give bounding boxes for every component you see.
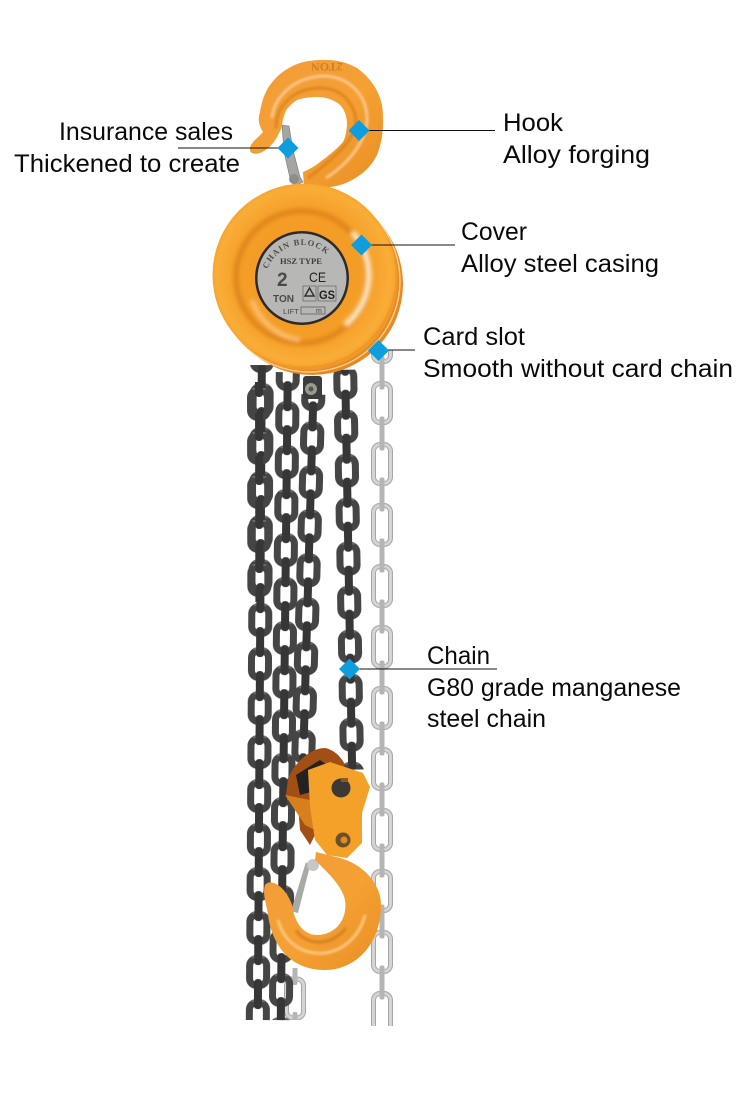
callout: Chain: steel chain — [427, 705, 546, 733]
callout: Chain: G80 grade manganese — [427, 674, 681, 702]
callout: Card slot: Card slot — [423, 323, 525, 351]
nameplate: CHAIN BLOCK: CHAIN BLOCK — [263, 239, 330, 268]
callout: Card slot — [368, 323, 733, 383]
block rear casing — [216, 188, 403, 375]
axle bolt — [332, 778, 350, 798]
bottom hook highlight — [278, 915, 365, 953]
block cover — [212, 184, 396, 366]
nameplate: LIFT: m — [316, 308, 322, 315]
nameplate: GS mark: GS — [319, 288, 335, 302]
callout: Hook — [348, 109, 650, 169]
callout: Hook: Alloy forging — [503, 141, 650, 169]
callout: Chain: Chain — [427, 642, 490, 670]
callout: Insurance sales: Thickened to create — [14, 150, 240, 178]
marker: chain diamond — [339, 658, 360, 680]
hook latch — [282, 125, 303, 186]
lower nut — [336, 832, 350, 848]
nameplate: CE: CE — [309, 269, 326, 285]
bottom hook — [264, 852, 381, 970]
callout: Hook: Hook — [503, 109, 564, 137]
load chain far left, overlapping strand — [244, 382, 274, 602]
callout: Cover: Cover — [461, 218, 527, 246]
hook forged mark: 2TON — [311, 60, 343, 74]
top hook — [250, 60, 383, 187]
load chain third — [288, 394, 328, 771]
nameplate: 2: 2 — [277, 270, 288, 291]
callout: Cover: Alloy steel casing — [461, 250, 659, 278]
nameplate: triangle mark — [303, 286, 316, 301]
chain anchor bolt — [303, 376, 322, 399]
grey chain end at bottom — [281, 968, 309, 1020]
marker: hook diamond — [348, 120, 370, 141]
load chain fourth — [330, 369, 367, 770]
marker: cover diamond — [351, 234, 372, 256]
bottom hook shadow — [296, 928, 346, 942]
nameplate: TON: TON — [273, 294, 294, 305]
nameplate: HSZ TYPE: HSZ TYPE — [280, 256, 322, 266]
marker: latch diamond — [278, 138, 298, 158]
cover highlight lower left — [252, 300, 300, 340]
hand chain (light grey) — [368, 350, 396, 1026]
nameplate — [255, 231, 349, 325]
sheave behind plate — [286, 748, 345, 845]
lower hook block — [285, 748, 370, 858]
hook highlight — [272, 76, 367, 178]
nameplate: LIFT: LIFT — [283, 307, 299, 316]
load chain second — [266, 372, 303, 1020]
callout: Chain — [339, 642, 681, 733]
callout: Insurance sales — [14, 118, 298, 178]
hook body — [250, 60, 383, 187]
cover recess shadow — [236, 211, 368, 343]
bottom hook body — [264, 852, 381, 970]
callout: Cover — [351, 218, 659, 278]
hook shadow — [276, 88, 356, 178]
cover highlight — [345, 232, 369, 325]
callout: Card slot: Smooth without card chain — [423, 355, 733, 383]
bottom hook latch — [291, 859, 319, 913]
callout: Insurance sales: Insurance sales — [59, 118, 233, 146]
side plate — [308, 762, 370, 858]
marker: card slot diamond — [368, 340, 389, 361]
load chain far left — [243, 365, 277, 1020]
nameplate: LIFT — [283, 307, 325, 316]
